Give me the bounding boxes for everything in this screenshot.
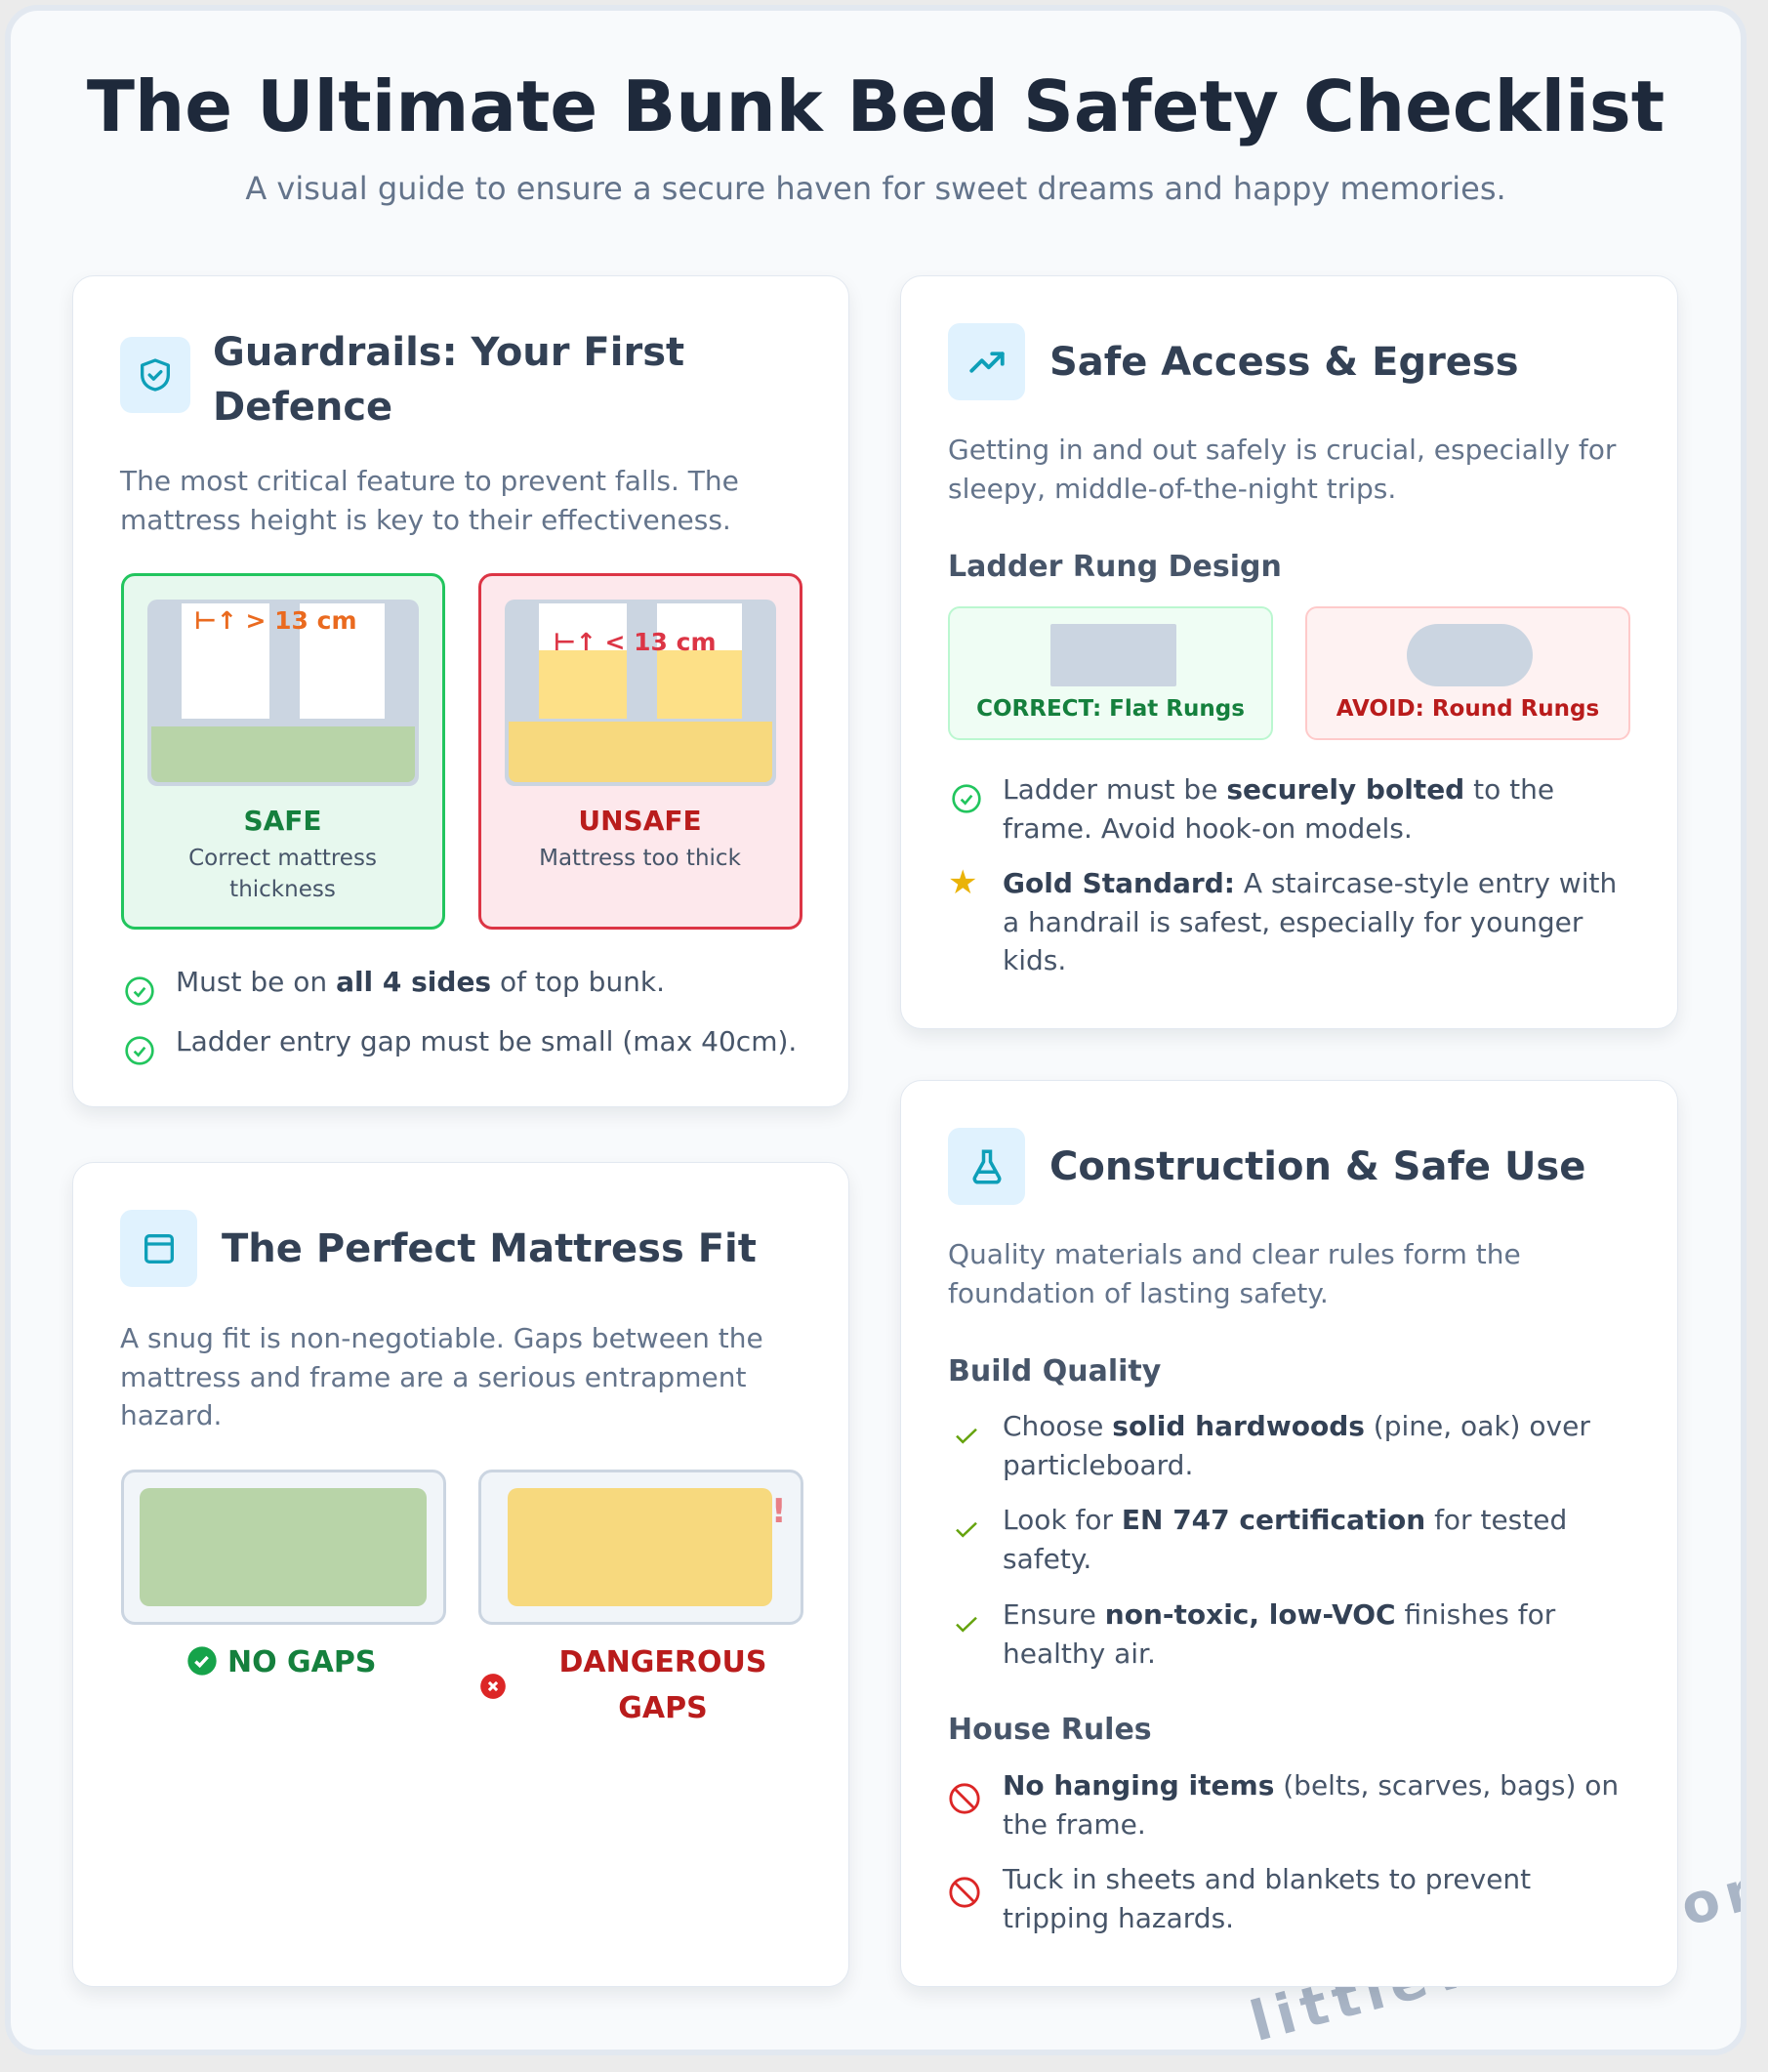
rung: round <box>1305 606 1630 740</box>
bed diagram safe <box>147 600 419 786</box>
label: dangerous gaps <box>480 1645 766 1725</box>
comparison: safe: Correct mattress <box>188 846 377 871</box>
description: A snug fit is non-negotiable. Gaps between the mattress and frame are a serious entrapment hazard. <box>120 1322 763 1431</box>
item: gold standard: Gold Standard: A staircase-style entry with a handrail is safest, especially for younger kids. <box>1003 867 1617 976</box>
comparison: unsafe <box>478 573 802 930</box>
description: The most critical feature to prevent falls. The mattress height is key to their effectiveness. <box>120 465 739 535</box>
panel: mattress fit <box>72 1162 849 1987</box>
label: no gaps: NO GAPS <box>227 1645 377 1679</box>
panel: construction <box>900 1080 1678 1987</box>
fit: gaps: ! <box>771 1492 787 1531</box>
item: gold standard: ★ <box>948 863 977 902</box>
icon: trend arrow <box>948 323 1025 400</box>
label unsafe: UNSAFE <box>578 805 702 837</box>
label: dangerous gaps: GAPS <box>618 1691 708 1725</box>
heading: The Perfect Mattress Fit <box>222 1226 757 1271</box>
item: bolted: Ladder must be securely bolted to the frame. Avoid hook-on models. <box>1003 773 1554 844</box>
label: dangerous gaps: DANGEROUS <box>559 1645 766 1679</box>
icon: mattress <box>120 1210 197 1287</box>
checklist item <box>125 966 665 1006</box>
subheading build: Build Quality <box>948 1354 1161 1388</box>
bed diagram unsafe: ⊢↑ < 13 cm <box>554 628 717 656</box>
bed diagram safe: ⊢↑ > 13 cm <box>194 606 357 635</box>
comparison: safe <box>121 573 445 930</box>
subheading: Ladder Rung Design <box>948 550 1282 584</box>
heading: Construction & Safe Use <box>1049 1144 1585 1189</box>
bed diagram unsafe <box>505 600 776 786</box>
description: Getting in and out safely is crucial, especially for sleepy, middle-of-the-night trips. <box>948 434 1616 504</box>
rung: round: AVOID: Round Rungs <box>1336 696 1599 722</box>
rung: flat <box>948 606 1273 740</box>
fit: gaps <box>478 1470 803 1625</box>
heading: Guardrails: Your First Defence <box>213 330 684 430</box>
panel: safe access <box>900 275 1678 1029</box>
rule item: Tuck in sheets and blankets to prevent tripping hazards. <box>1003 1863 1531 1933</box>
icon: shield <box>120 337 190 413</box>
panel: guardrails <box>72 275 849 1107</box>
item: Look for EN 747 certification for tested safety. <box>1003 1504 1567 1574</box>
rung: flat: CORRECT: Flat Rungs <box>976 696 1245 722</box>
panel: guardrails: Ladder entry gap must be small (max 40cm). <box>176 1025 797 1057</box>
fit: no gaps <box>121 1470 446 1625</box>
description: Quality materials and clear rules form the foundation of lasting safety. <box>948 1238 1521 1308</box>
checklist item <box>125 1025 797 1065</box>
panel: guardrails: Must be on all 4 sides of top bunk. <box>176 966 665 998</box>
icon: flask <box>948 1128 1025 1205</box>
item: Choose solid hardwoods (pine, oak) over particleboard. <box>1003 1410 1590 1480</box>
comparison: unsafe: Mattress too thick <box>539 846 741 871</box>
title: The Ultimate Bunk Bed Safety Checklist <box>87 65 1665 147</box>
subheading rules: House Rules <box>948 1713 1152 1747</box>
heading: Safe Access & Egress <box>1049 340 1519 385</box>
subtitle: A visual guide to ensure a secure haven for sweet dreams and happy memories. <box>245 170 1506 207</box>
item: Ensure non-toxic, low-VOC finishes for healthy air. <box>1003 1598 1555 1670</box>
comparison: safe: thickness <box>229 877 336 902</box>
label safe: SAFE <box>243 805 322 837</box>
rule item: No hanging items (belts, scarves, bags) on the frame. <box>1003 1769 1619 1840</box>
